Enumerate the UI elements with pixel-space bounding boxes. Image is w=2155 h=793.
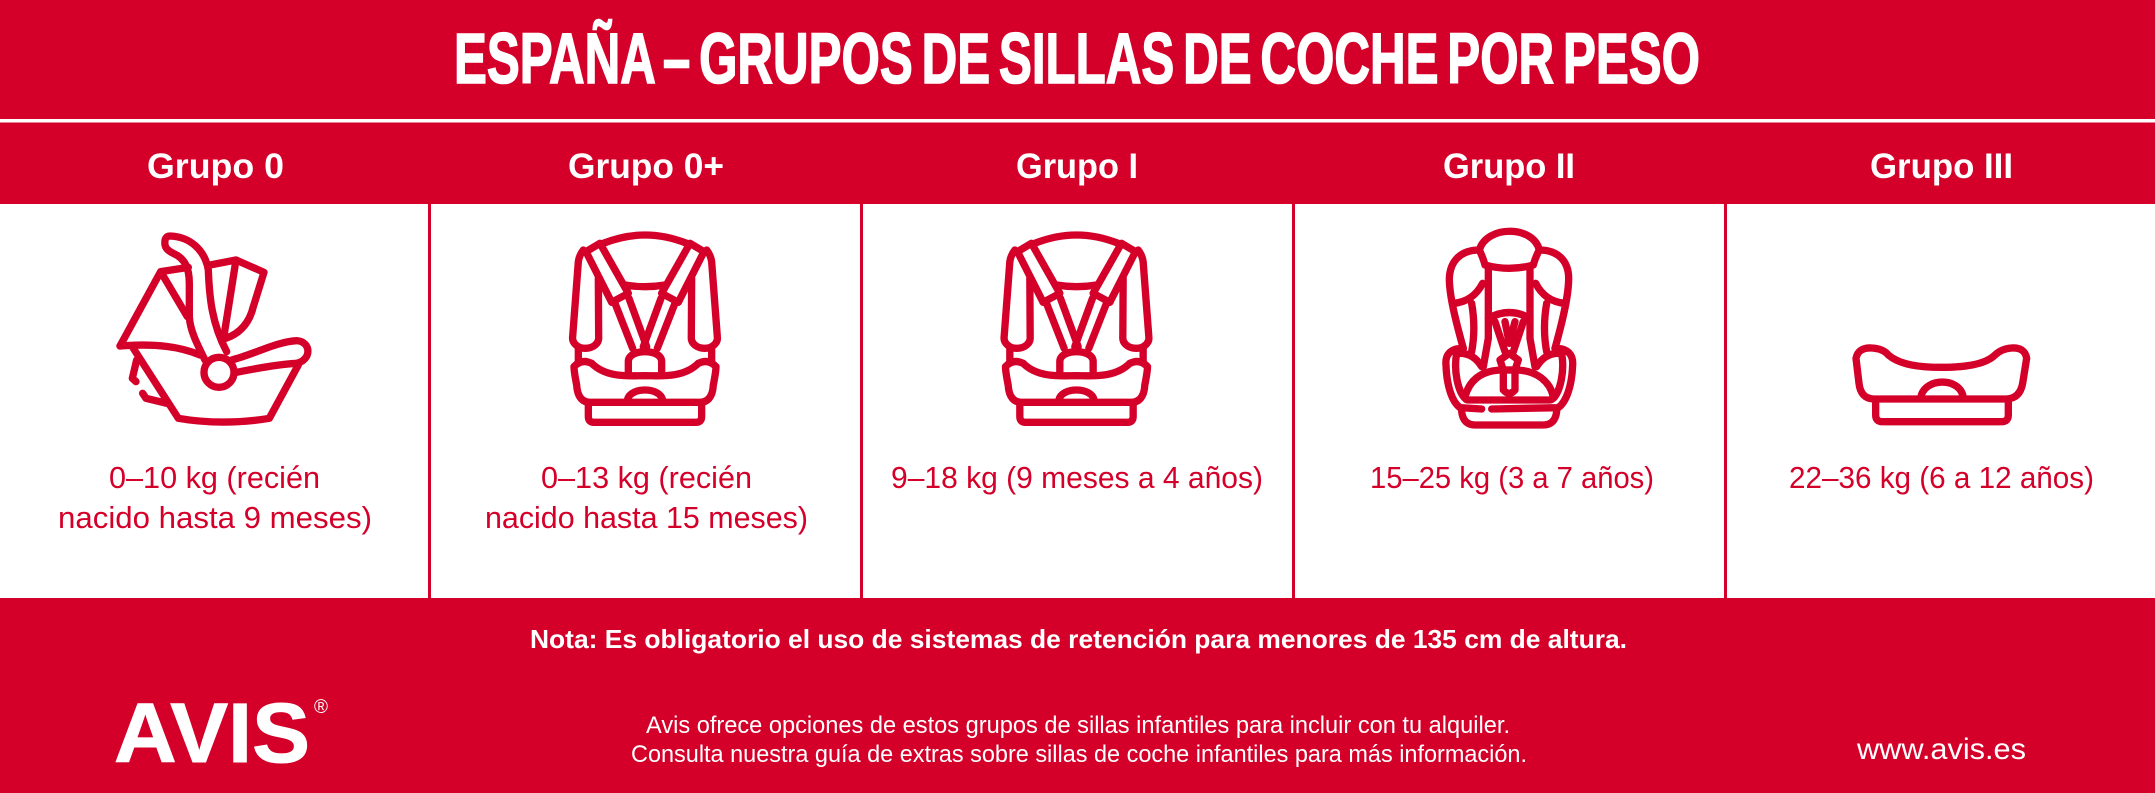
weight text: Grupo 0 (58, 460, 372, 535)
weight text: Grupo 0: nacido hasta 9 meses) (58, 500, 372, 535)
note: Nota: Es obligatorio el uso de sistemas de retención para menores de 135 cm de altura. (530, 624, 1627, 654)
footer text: Avis ofrece opciones de estos grupos de sillas infantiles para incluir con tu alquiler. (646, 712, 1510, 739)
heading: Grupo II: Grupo II (1443, 147, 1575, 186)
footer text: Consulta nuestra guía de extras sobre sillas de coche infantiles para más información. (631, 741, 1527, 768)
panel: Grupo I (863, 147, 1292, 598)
heading: Grupo 0: Grupo 0 (147, 147, 284, 186)
icon: high-back booster seat (1446, 231, 1573, 425)
weight text: Grupo II: 15–25 kg (3 a 7 años) (1370, 460, 1654, 495)
panel: Grupo II (1295, 147, 1724, 598)
heading: Grupo 0+: Grupo 0+ (568, 147, 724, 186)
panel: Grupo III (1727, 147, 2155, 598)
panel: Grupo 0 (0, 147, 428, 598)
heading: Grupo III: Grupo III (1870, 147, 2013, 186)
weight text: Grupo 0+: 0–13 kg (recién (541, 460, 752, 495)
icon: backless booster (1856, 348, 2027, 422)
website: www.avis.es (1856, 733, 2026, 766)
icon: child seat with harness (1004, 235, 1149, 422)
weight text: Grupo 0+: nacido hasta 15 meses) (485, 500, 808, 535)
panel: Grupo 0+ (431, 147, 860, 598)
heading: Grupo I: Grupo I (1016, 147, 1138, 186)
icon: child seat with harness (573, 235, 717, 422)
weight text: Grupo 0: 0–10 kg (recién (109, 460, 320, 495)
footer text (631, 712, 1527, 768)
weight text: Grupo III: 22–36 kg (6 a 12 años) (1789, 460, 2094, 495)
icon: infant carrier (120, 236, 308, 422)
logo: AVIS: AVIS (114, 686, 310, 780)
logo: AVIS: ® (314, 697, 328, 718)
weight text: Grupo 0+ (485, 460, 808, 535)
weight text: Grupo I: 9–18 kg (9 meses a 4 años) (891, 460, 1263, 495)
